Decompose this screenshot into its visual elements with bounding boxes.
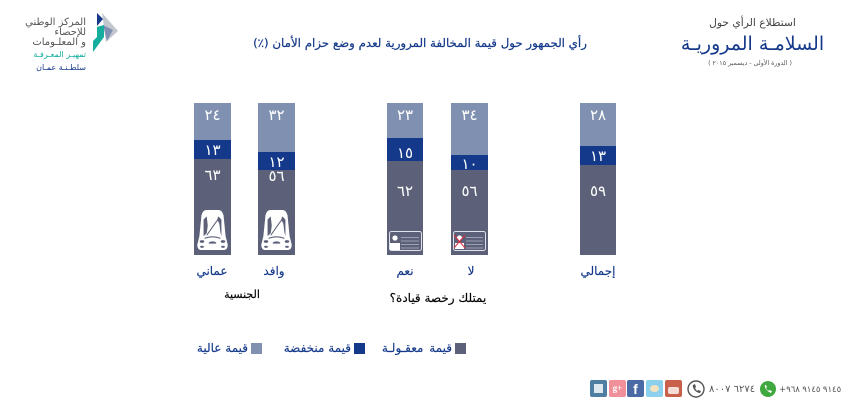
logo text: و المعلـومات [32,37,86,48]
icon: facebook [627,380,644,397]
bar: Licence yes: ٢٣ [397,106,413,124]
legend [197,341,466,356]
bar: Total: ٥٩ [590,182,606,200]
bar: Omani: ٢٤ [204,106,221,124]
logo tagline: تمهيـر المعـرفـة [33,50,86,59]
bar: Total [580,103,616,255]
icon: seat belt [261,210,292,250]
icon: instagram [590,380,607,397]
bar: Licence yes: ٦٢ [397,182,413,200]
bar: Expat: ٣٢ [268,106,285,124]
group label: licence: يمتلك رخصة قيادة؟ [390,291,486,305]
category label: وافد [263,264,285,278]
bar: Total: ١٣ [590,147,606,165]
bar: Omani: ١٣ [204,141,221,159]
legend swatch: low [354,343,365,354]
bar: Omani [194,103,231,255]
bar: Licence no: ١٠ [461,155,478,173]
logo [25,13,118,72]
bar: Licence no: ٥٦ [461,182,478,200]
icon: licence card [389,231,422,251]
bar: Expat: ٥٦ [268,167,285,185]
title line 1: استطلاع الرأي حول [709,16,796,29]
footer contact and social [590,380,841,398]
bar: Licence yes [387,103,423,255]
legend label: reasonable: قيمة معقـولـة [382,341,452,355]
bar: Licence no: ٣٤ [461,106,478,124]
group label: nationality: الجنسية [224,288,260,301]
legend label: high: قيمة عالية [197,341,248,355]
logo text: المركز الوطني [25,17,86,28]
legend swatch: reasonable [455,343,466,354]
icon: twitter [646,380,663,397]
whatsapp number: +٩٦٨ ٩١٤٥ ٩١٤٥ [779,385,841,395]
bar: Omani: ٦٣ [204,166,221,184]
legend swatch: high [251,343,262,354]
main title: السلامـة المروريـة [681,33,824,55]
icon: google plus: g+ [613,383,622,393]
bar: Licence yes: ١٥ [397,144,413,162]
icon: google plus [609,380,626,397]
category label: إجمالي [580,264,616,278]
category label: نعم [396,264,414,278]
phone number: ٨٠٠٧ ٦٢٧٤ [709,384,755,395]
icon: no licence card [453,231,486,251]
survey title block [681,16,824,67]
icon: facebook: f [633,381,638,397]
logo text [25,17,86,48]
category label: عماني [196,264,228,278]
icon: seat belt [197,210,228,250]
icon: phone [687,380,705,398]
edition: ( الدورة الأولى - ديسمبر ٢٠١٥ ) [708,60,792,67]
bar: Licence no [451,103,488,255]
chart heading: رأي الجمهور حول قيمة المخالفة المرورية لعدم وضع حزام الأمان (٪) [253,36,587,50]
logo text: للإحصاء [54,27,86,38]
legend label: low: قيمة منخفضة [284,341,351,355]
logo mark [93,13,118,52]
icon: youtube [665,380,682,397]
icon: whatsapp [760,381,776,397]
category label: لا [468,264,474,278]
bar: Total: ٢٨ [590,106,606,124]
logo country: سلطـنـة عمـان [36,63,86,72]
bar: Expat: ١٢ [268,153,285,171]
bar: Expat [258,103,295,255]
